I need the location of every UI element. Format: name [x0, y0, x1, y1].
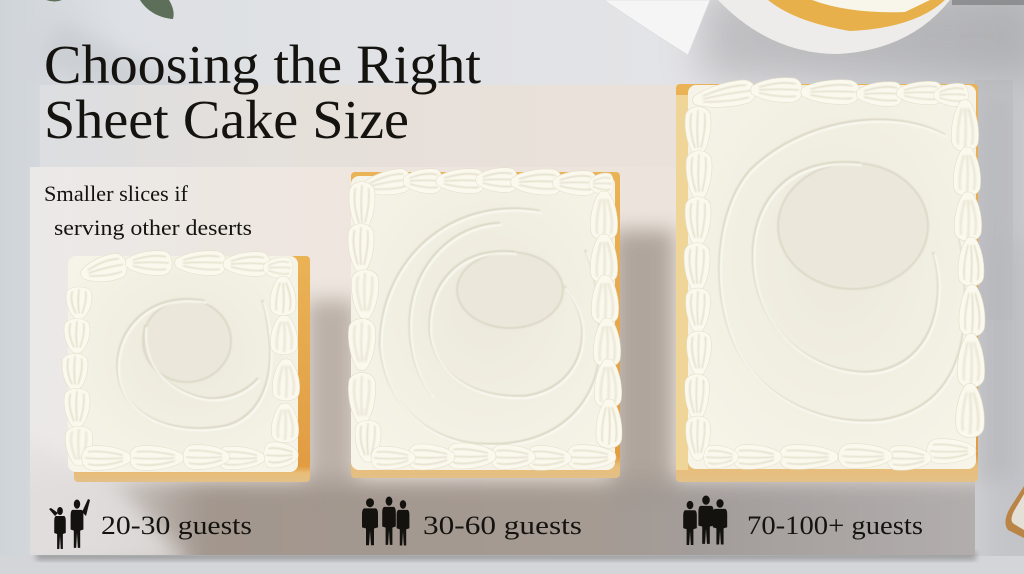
frosting swirl: medium	[380, 209, 602, 446]
piping: medium	[348, 167, 622, 470]
decor: plate with cake	[718, 0, 1024, 54]
cake: large	[676, 78, 985, 482]
label: 70-100+ guests: 70-100+ guests	[747, 511, 923, 540]
icon: two people	[49, 499, 90, 549]
piping: small	[62, 251, 300, 470]
icon: three people close together	[683, 496, 727, 545]
frosting swirl: small	[117, 299, 272, 430]
panel: upper parchment sheet	[40, 85, 975, 175]
icon: eucalyptus leaf	[46, 0, 174, 19]
note: smaller slices	[44, 181, 252, 240]
decor: wooden board corner	[1005, 486, 1024, 538]
label: 20-30 guests: 20-30 guests	[101, 511, 252, 540]
cake: small	[62, 251, 310, 482]
title: Sheet Cake Size	[44, 89, 409, 150]
note: smaller slices: Smaller slices if	[44, 181, 189, 206]
label: 30-60 guests: 30-60 guests	[423, 511, 582, 540]
icon: three people	[362, 497, 409, 546]
note: smaller slices: serving other deserts	[54, 215, 252, 240]
decor: napkin	[604, 0, 710, 55]
title	[44, 34, 481, 150]
piping: large	[684, 78, 985, 470]
cake: medium	[348, 167, 622, 478]
title: Choosing the Right	[44, 34, 481, 95]
frosting swirl: large	[719, 120, 967, 423]
